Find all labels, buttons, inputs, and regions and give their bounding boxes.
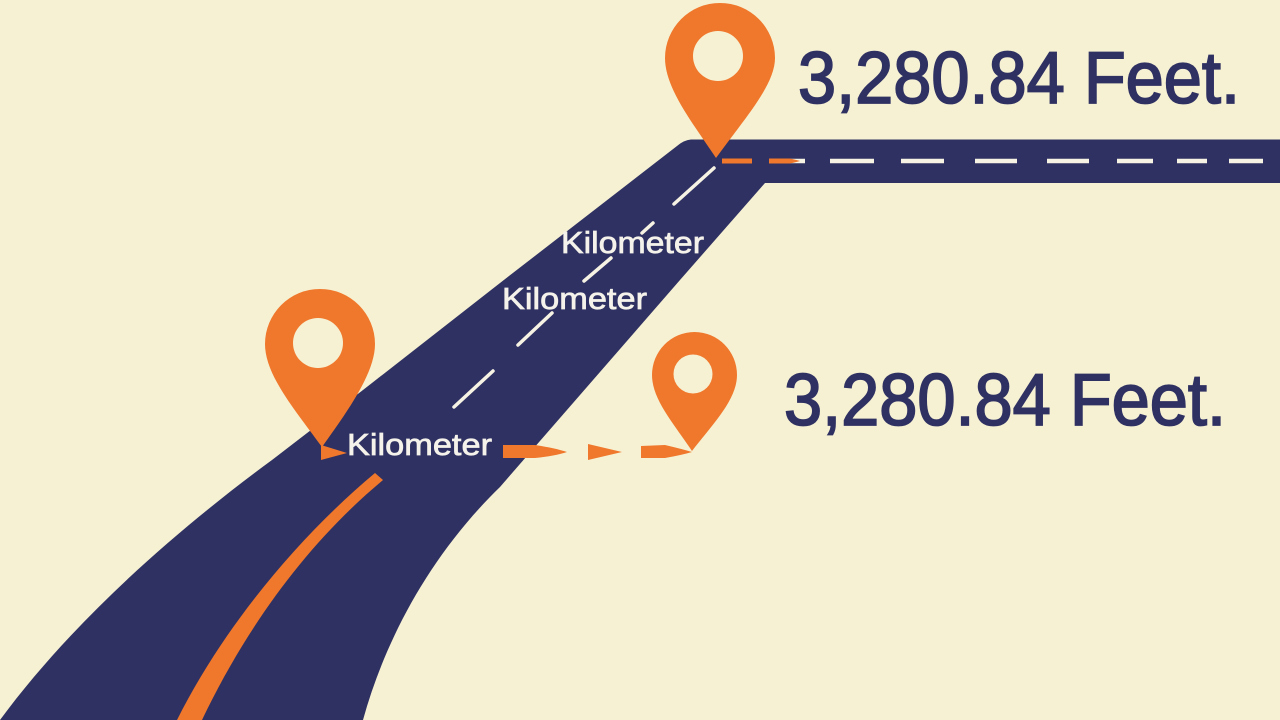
icon: top location pin xyxy=(665,3,775,158)
label: lower distance: 3,280.84 Feet. xyxy=(784,360,1226,441)
label: kilometer middle: Kilometer xyxy=(502,281,647,316)
icon: lower right location pin xyxy=(652,332,737,451)
label: kilometer upper: Kilometer xyxy=(561,225,704,260)
label: kilometer lower: Kilometer xyxy=(347,427,492,462)
orange centre line on curved road xyxy=(177,473,383,720)
orange road dashes near top pin xyxy=(722,158,800,164)
icon: left location pin xyxy=(265,289,375,447)
road centre dashes: horizontal xyxy=(785,159,1263,163)
road centre dashes: diagonal xyxy=(454,168,714,407)
label: top distance: 3,280.84 Feet. xyxy=(798,38,1240,119)
orange pointer at left pin base xyxy=(321,445,347,460)
orange dashed connector to lower right pin xyxy=(503,444,692,460)
